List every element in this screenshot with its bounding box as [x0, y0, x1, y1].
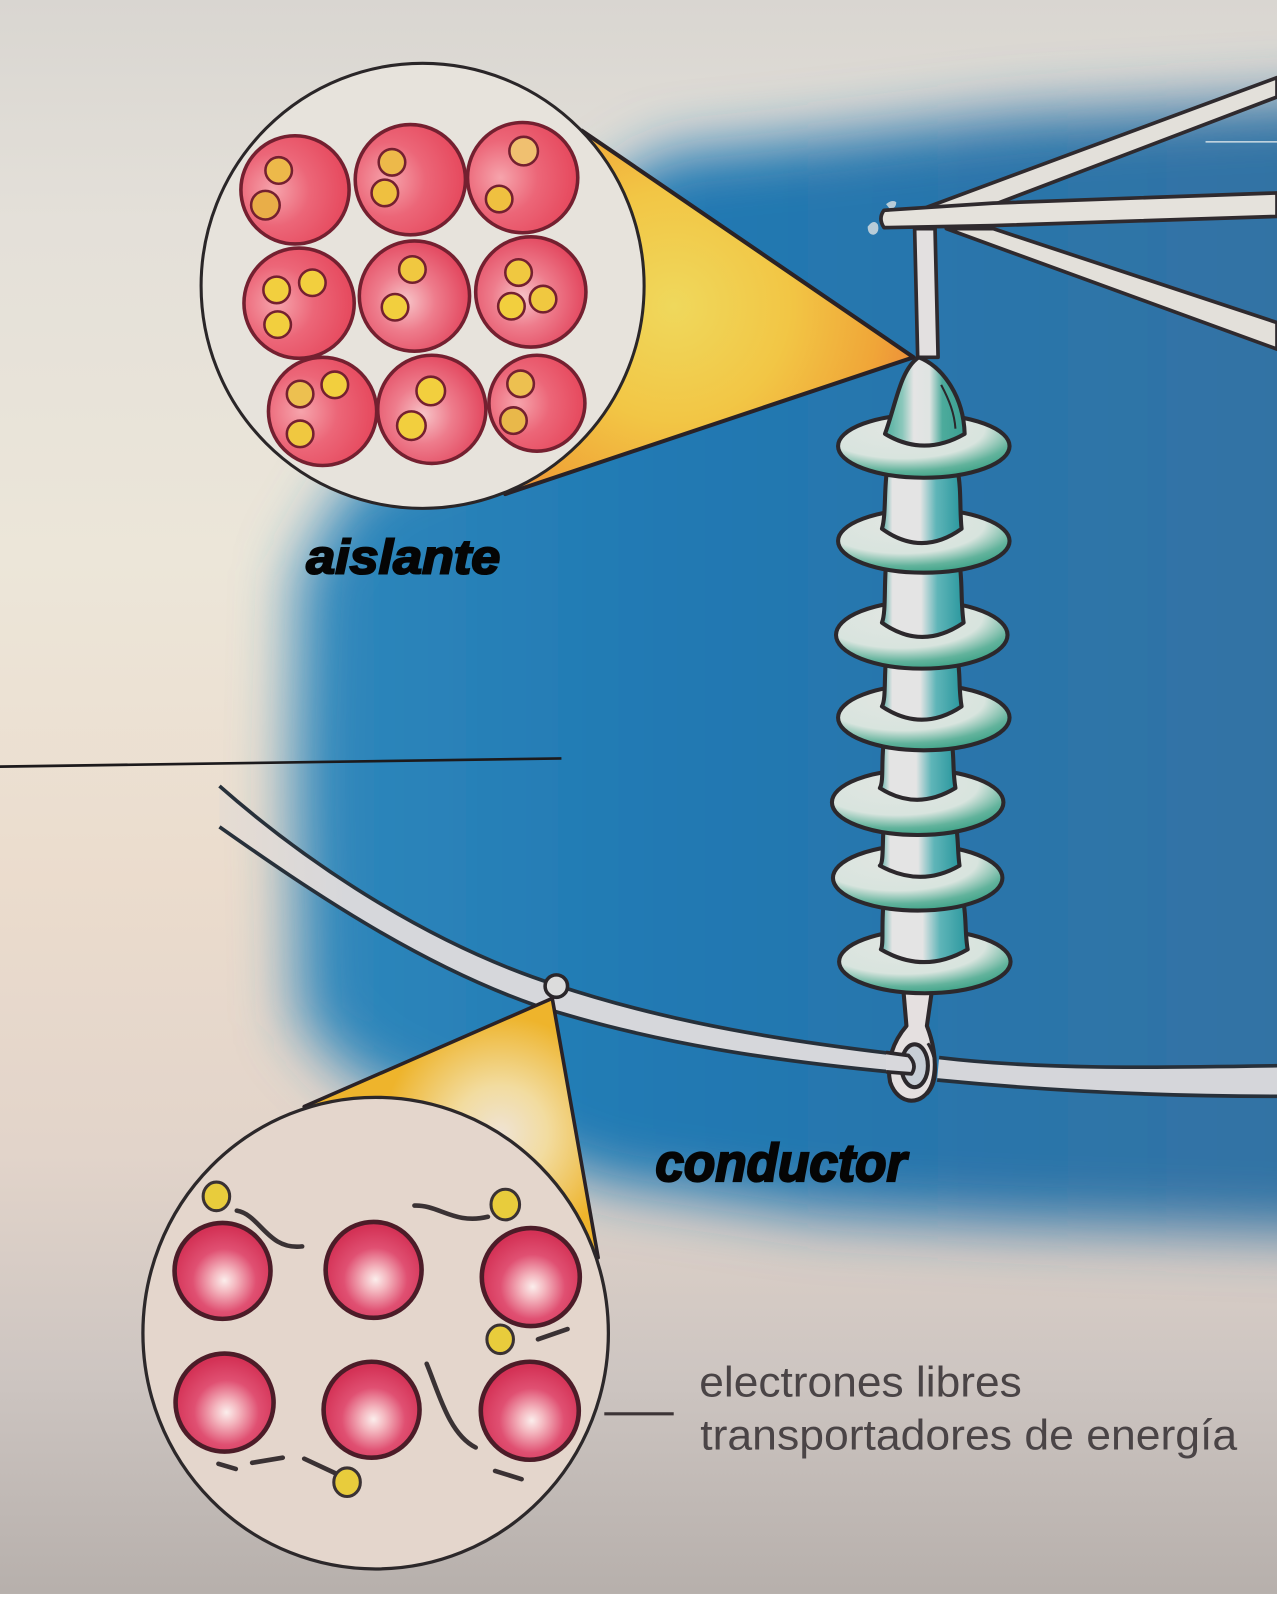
power cable left outline: [219, 786, 912, 1074]
atom 6: [476, 237, 586, 347]
power cable right outline: [937, 1058, 1277, 1096]
atom 3: [468, 122, 578, 233]
power cable right segment: [937, 1058, 1277, 1096]
free electron 4: [334, 1468, 360, 1496]
circle body: [143, 1097, 608, 1569]
conductor zoom circle: [143, 1097, 608, 1569]
neck 1-2: [882, 470, 962, 543]
disc 5: [832, 770, 1003, 835]
nucleus 1: [175, 1223, 271, 1319]
label: aislante: aislante: [306, 532, 500, 585]
vertical post: [915, 229, 938, 357]
top magnification cone: [505, 131, 914, 494]
neck 2-3: [882, 563, 964, 637]
insulator string: [832, 357, 1011, 1101]
insulator zoom circle: [201, 63, 644, 508]
nucleus 4: [176, 1354, 274, 1452]
disc 1: [838, 414, 1010, 478]
hook: [889, 990, 935, 1101]
free electron 3: [487, 1325, 513, 1354]
hook front: [927, 1043, 935, 1094]
atom 9: [489, 355, 585, 451]
atom 8: [378, 355, 486, 463]
neck 3-4: [882, 658, 962, 720]
neck 5-6: [880, 822, 960, 877]
disc 3: [836, 601, 1008, 669]
cable end in hook: [886, 1052, 914, 1074]
lower strut: [946, 229, 1277, 349]
nucleus 2: [326, 1222, 422, 1318]
disc 2: [838, 509, 1010, 573]
white hairline: [1206, 141, 1277, 143]
upper strut: [927, 78, 1277, 207]
tower arms: [868, 78, 1277, 357]
circle body: [201, 63, 644, 508]
disc 7: [839, 930, 1011, 993]
atom 2: [355, 125, 465, 235]
caption: transportadores de energia: transportadores de energía: [700, 1412, 1237, 1460]
leader line: [604, 1412, 674, 1415]
power cable left segment: [219, 786, 912, 1074]
free electron 2: [491, 1189, 520, 1220]
nucleus 5: [324, 1362, 420, 1458]
atom 1: [241, 136, 349, 244]
blue airbrushed background: [293, 97, 1277, 1235]
disc 4: [838, 685, 1010, 750]
disc 6: [833, 845, 1002, 911]
bottom magnification cone: [304, 998, 598, 1258]
atom 7: [268, 357, 377, 465]
nucleus 6: [481, 1362, 579, 1460]
nucleus 3: [482, 1228, 580, 1326]
insulator cap: [885, 357, 965, 446]
label: conductor: conductor: [655, 1134, 910, 1193]
caption: electrones libres: electrones libres: [699, 1358, 1022, 1406]
paint smudges: [868, 201, 896, 235]
neck 6-7: [881, 898, 968, 962]
cable clamp ring: [545, 975, 568, 997]
atom 4: [244, 248, 354, 358]
electron trail marks: [218, 1206, 568, 1479]
hook eye: [901, 1044, 928, 1087]
atom 5: [359, 241, 470, 351]
free electron 1: [203, 1182, 230, 1211]
neck 4-5: [880, 740, 955, 800]
cap highlight stroke: [941, 385, 955, 429]
thin horizontal rule: [0, 758, 561, 767]
centre beam: [881, 193, 1277, 228]
white bottom edge: [0, 1594, 1277, 1600]
